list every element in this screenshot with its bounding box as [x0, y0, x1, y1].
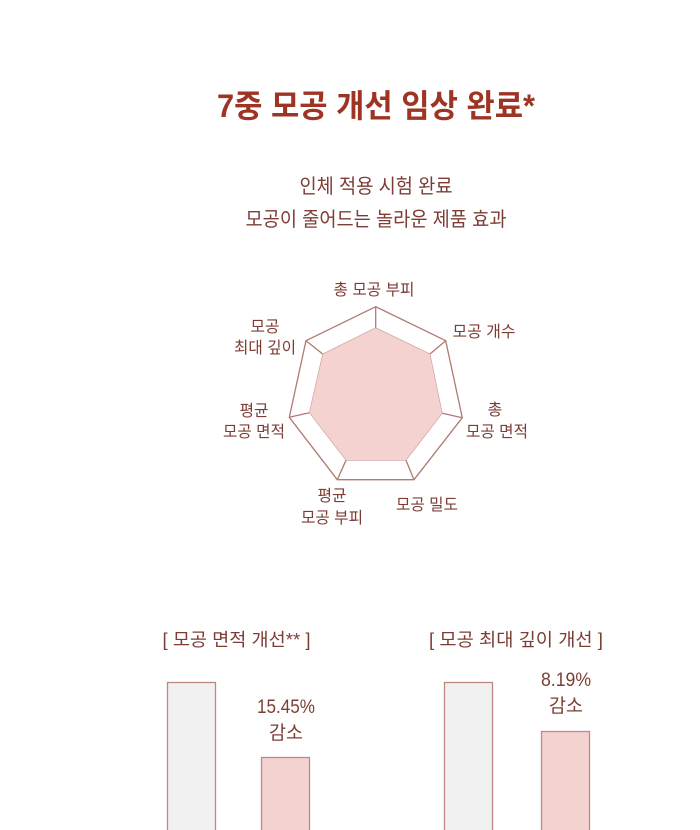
radar labels: 모공 부피: [301, 509, 363, 527]
radar labels: 모공 면적: [466, 423, 528, 441]
title: 7중 모공 개선 임상 완료*: [217, 88, 536, 124]
subtitle: 인체 적용 시험 완료: [300, 175, 452, 198]
radar outer heptagon: [289, 307, 462, 480]
radar labels: 총 모공 부피: [334, 281, 414, 299]
result value: [541, 670, 591, 717]
radar labels: 모공 개수: [452, 323, 516, 341]
radar labels: [223, 281, 528, 527]
chart heading: [ 모공 최대 깊이 개선 ]: [429, 630, 603, 650]
result bar: [262, 758, 310, 830]
bar chart: maximum pore depth: [429, 630, 603, 830]
result value: 감소: [269, 722, 303, 744]
baseline bar: [444, 682, 492, 830]
radar labels: 평균: [318, 487, 346, 505]
radar labels: 모공: [250, 319, 280, 336]
baseline bar: [168, 682, 216, 830]
subtitle: 모공이 줄어드는 놀라운 제품 효과: [246, 208, 506, 231]
result value: 8.19%: [541, 670, 591, 691]
radar labels: 평균: [240, 402, 268, 420]
chart heading: [ 모공 면적 개선** ]: [162, 630, 310, 650]
radar chart: [289, 307, 462, 480]
radar labels: 총: [488, 401, 502, 419]
radar filled area: [309, 328, 442, 460]
result value: [257, 697, 315, 744]
radar labels: 모공 면적: [223, 423, 285, 441]
radar labels: 모공 밀도: [396, 496, 458, 514]
subtitle: [246, 175, 506, 231]
radar spokes: [289, 307, 462, 480]
result bar: [542, 732, 590, 830]
result value: 감소: [549, 695, 583, 717]
result value: 15.45%: [257, 697, 315, 718]
radar labels: 최대 깊이: [234, 339, 296, 357]
bar chart: pore area: [162, 630, 315, 830]
